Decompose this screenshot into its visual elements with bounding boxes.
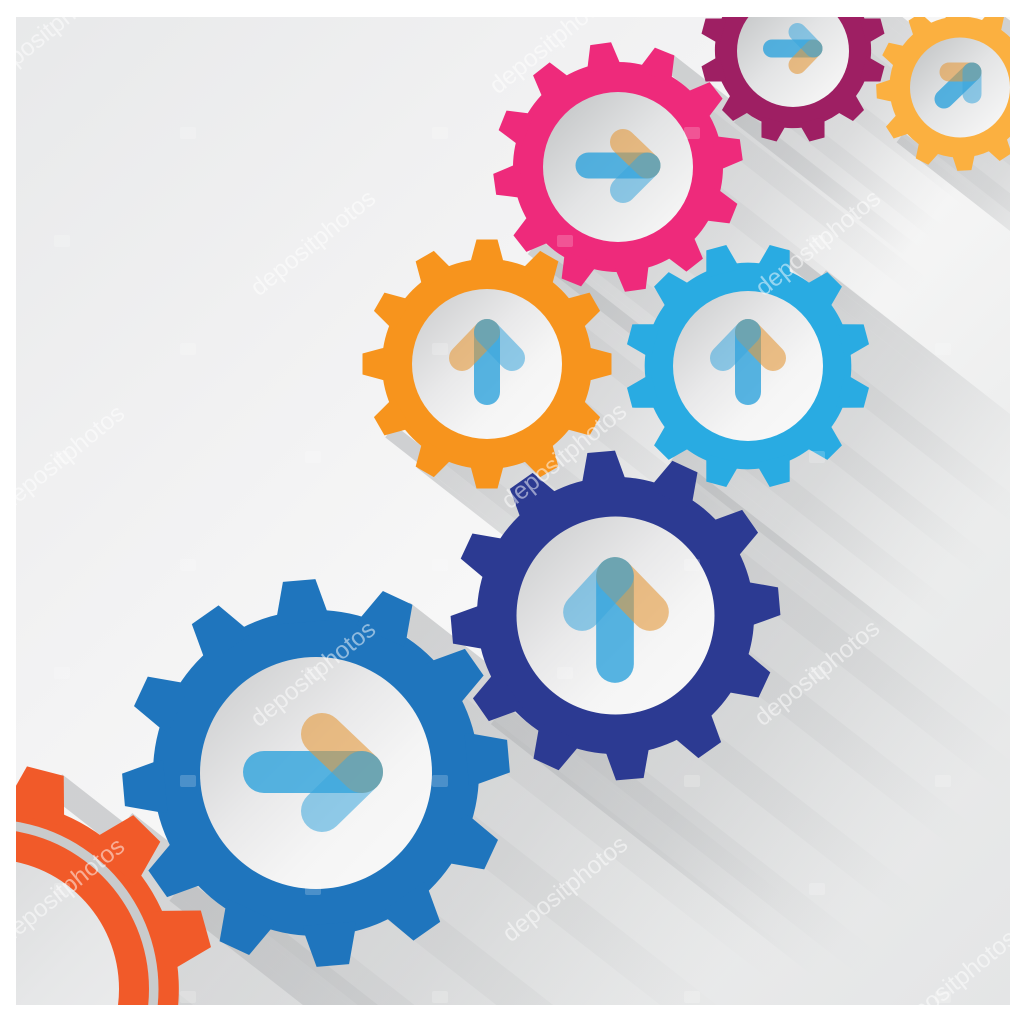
inner disc (737, 17, 849, 107)
icon: right arrow (264, 734, 362, 811)
icon: up arrow (462, 332, 512, 392)
gear: blue (122, 579, 510, 967)
gear: orange (362, 240, 612, 488)
inner disc (516, 516, 714, 714)
inner disc (673, 291, 823, 441)
gear: navy (450, 450, 780, 780)
watermark text: depositphotos (245, 616, 381, 733)
inner disc (412, 289, 562, 439)
gear: yellow (876, 17, 1010, 171)
watermark text: depositphotos (496, 398, 632, 515)
gear: light blue (627, 245, 869, 487)
watermark text: depositphotos (497, 831, 633, 948)
inner disc (200, 657, 432, 889)
gear: maroon (702, 17, 884, 142)
gear: pink (493, 42, 743, 292)
icon: up arrow (723, 332, 773, 392)
inner disc (910, 38, 1010, 138)
watermark text: depositphotos (245, 185, 381, 302)
icon: up arrow (582, 576, 650, 664)
watermark camera icons (64, 127, 825, 1003)
watermark text: depositphotos (749, 615, 885, 732)
icon: right arrow (588, 142, 648, 190)
icon: right arrow (772, 32, 814, 65)
watermark text: depositphotos (750, 185, 886, 302)
gear: red-orange ring (16, 766, 211, 1005)
icon: up-right arrow (944, 72, 972, 99)
inner disc (543, 92, 693, 242)
